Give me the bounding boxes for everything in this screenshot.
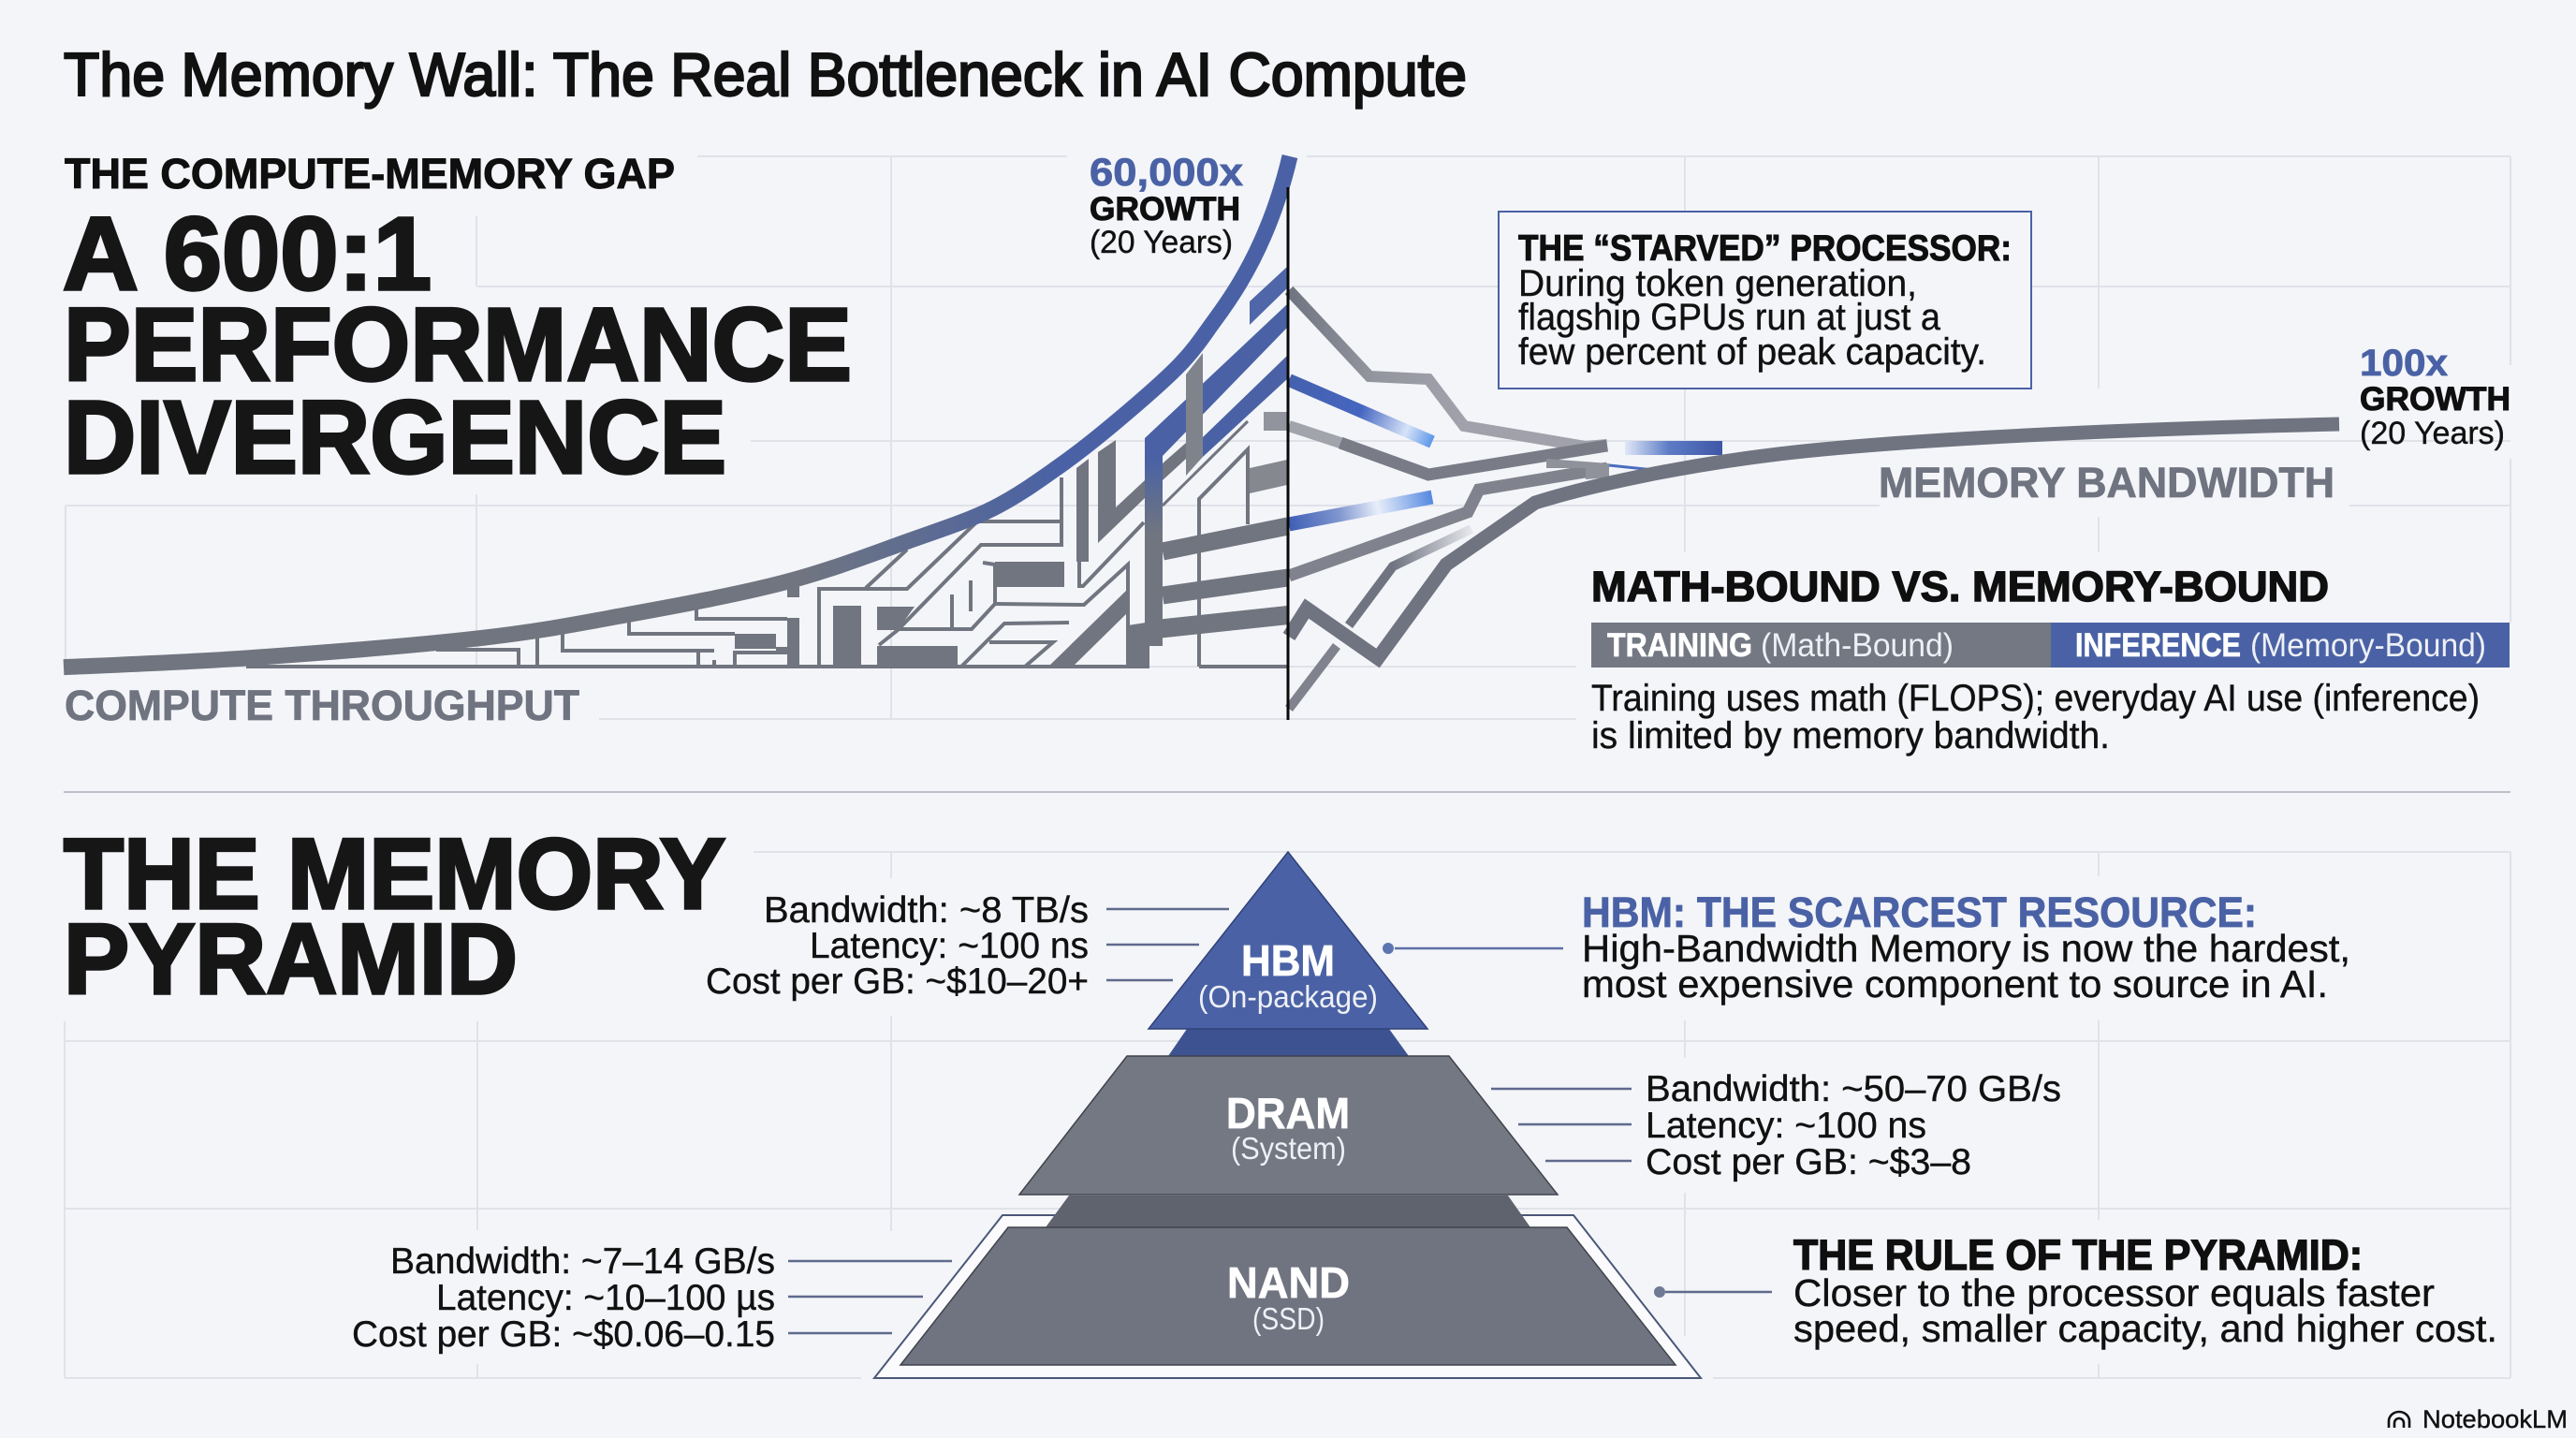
pyramid tier: NAND	[900, 1227, 1676, 1365]
processor divider line	[1286, 187, 1290, 720]
section heading: the memory pyramid: THE MEMORY	[64, 817, 725, 930]
label: compute throughput: COMPUTE THROUGHPUT	[65, 682, 579, 729]
NAND tier label: NAND	[1227, 1258, 1350, 1307]
HBM specs: Latency: ~100 ns	[810, 926, 1089, 966]
callout: HBM the scarcest resource: most expensive component to source in AI.	[1582, 962, 2328, 1005]
NAND specs	[352, 1241, 952, 1355]
label: 60,000x growth: 60,000x	[1090, 150, 1244, 194]
panel: math-bound vs memory-bound	[1591, 563, 2510, 756]
circuit traces left of the processor line	[246, 267, 1288, 667]
HBM specs	[706, 890, 1229, 1002]
callout: the rule of the pyramid: THE RULE OF THE PYRAMID:	[1793, 1231, 2363, 1279]
section heading: the compute-memory gap: PERFORMANCE	[64, 287, 852, 403]
label: 100x growth	[2360, 343, 2510, 451]
panel: math-bound vs memory-bound: Training uses math (FLOPS); everyday AI use (inference)	[1591, 678, 2480, 719]
label: 60,000x growth	[1090, 150, 1244, 260]
callout: the rule of the pyramid: Closer to the processor equals faster	[1793, 1271, 2435, 1314]
split bar: training vs inference: (Memory-Bound)	[2250, 627, 2486, 664]
connector under HBM	[1168, 1029, 1409, 1056]
DRAM tier label	[1226, 1089, 1350, 1166]
NotebookLM watermark: NotebookLM	[2422, 1405, 2568, 1433]
split bar: training vs inference: INFERENCE	[2075, 627, 2241, 664]
icon: NotebookLM arcs	[2389, 1412, 2409, 1428]
label: 60,000x growth: (20 Years)	[1090, 225, 1233, 260]
callout: the rule of the pyramid: speed, smaller capacity, and higher cost.	[1793, 1307, 2497, 1350]
split bar: training vs inference: TRAINING	[1607, 627, 1752, 664]
panel: math-bound vs memory-bound: is limited by memory bandwidth.	[1591, 715, 2110, 756]
section heading: the compute-memory gap	[63, 150, 852, 495]
callout: the starved processor: few percent of peak capacity.	[1518, 331, 1986, 373]
section heading: the compute-memory gap: A 600:1	[63, 197, 432, 312]
NAND specs: Latency: ~10–100 µs	[436, 1278, 775, 1318]
NAND tier label: (SSD)	[1252, 1301, 1325, 1336]
callout: the starved processor	[1499, 212, 2031, 389]
NAND tier label	[1227, 1258, 1350, 1336]
callout: HBM the scarcest resource: HBM: THE SCARCEST RESOURCE:	[1582, 888, 2257, 936]
NAND specs: Cost per GB: ~$0.06–0.15	[352, 1314, 775, 1355]
callout: HBM the scarcest resource: High-Bandwidth Memory is now the hardest,	[1582, 927, 2350, 970]
NAND specs: Bandwidth: ~7–14 GB/s	[390, 1241, 775, 1282]
connector under DRAM	[1046, 1196, 1530, 1227]
section heading: the memory pyramid: PYRAMID	[64, 902, 518, 1015]
HBM tier label	[1198, 936, 1378, 1014]
split bar: training vs inference	[1591, 623, 2510, 668]
DRAM specs	[1491, 1069, 2061, 1182]
HBM tier label: HBM	[1241, 936, 1335, 985]
label: 100x growth: GROWTH	[2360, 381, 2510, 418]
callout: HBM the scarcest resource	[1383, 888, 2350, 1005]
traces right of the processor line converging into memory bandwidth	[1289, 290, 2339, 709]
memory pyramid diagram	[874, 852, 1701, 1378]
chart: compute versus memory divergence with circuit traces	[64, 156, 2339, 720]
DRAM tier label: (System)	[1231, 1131, 1346, 1166]
section heading: the compute-memory gap: DIVERGENCE	[64, 380, 726, 495]
label: memory bandwidth: MEMORY BANDWIDTH	[1879, 459, 2334, 506]
section heading: the compute-memory gap: THE COMPUTE-MEMORY GAP	[65, 150, 675, 198]
HBM tier label: (On-package)	[1198, 979, 1378, 1014]
DRAM specs: Latency: ~100 ns	[1646, 1106, 1926, 1146]
pyramid tier: HBM	[1149, 852, 1427, 1029]
DRAM tier label: DRAM	[1226, 1089, 1350, 1137]
label: 100x growth: 100x	[2360, 343, 2448, 384]
panel: math-bound vs memory-bound: MATH-BOUND VS. MEMORY-BOUND	[1591, 563, 2329, 610]
split bar: training vs inference: (Math-Bound)	[1761, 627, 1954, 664]
callout: the starved processor: THE “STARVED” PROCESSOR:	[1518, 228, 2012, 269]
DRAM specs: Cost per GB: ~$3–8	[1646, 1142, 1971, 1182]
callout: the starved processor: flagship GPUs run at just a	[1518, 297, 1941, 338]
pyramid tier: DRAM	[1019, 1056, 1558, 1195]
label: 60,000x growth: GROWTH	[1090, 191, 1240, 227]
HBM specs: Cost per GB: ~$10–20+	[706, 961, 1089, 1002]
compute throughput curve	[64, 156, 1290, 668]
callout: the rule of the pyramid	[1654, 1231, 2497, 1350]
label: 100x growth: (20 Years)	[2360, 416, 2505, 451]
callout: the starved processor: During token generation,	[1518, 263, 1917, 304]
HBM specs: Bandwidth: ~8 TB/s	[764, 890, 1089, 931]
title: The Memory Wall: The Real Bottleneck in AI Compute	[64, 40, 1467, 109]
section heading: the memory pyramid	[64, 817, 725, 1015]
pyramid tier: NAND outline	[874, 1215, 1701, 1378]
DRAM specs: Bandwidth: ~50–70 GB/s	[1646, 1069, 2061, 1109]
